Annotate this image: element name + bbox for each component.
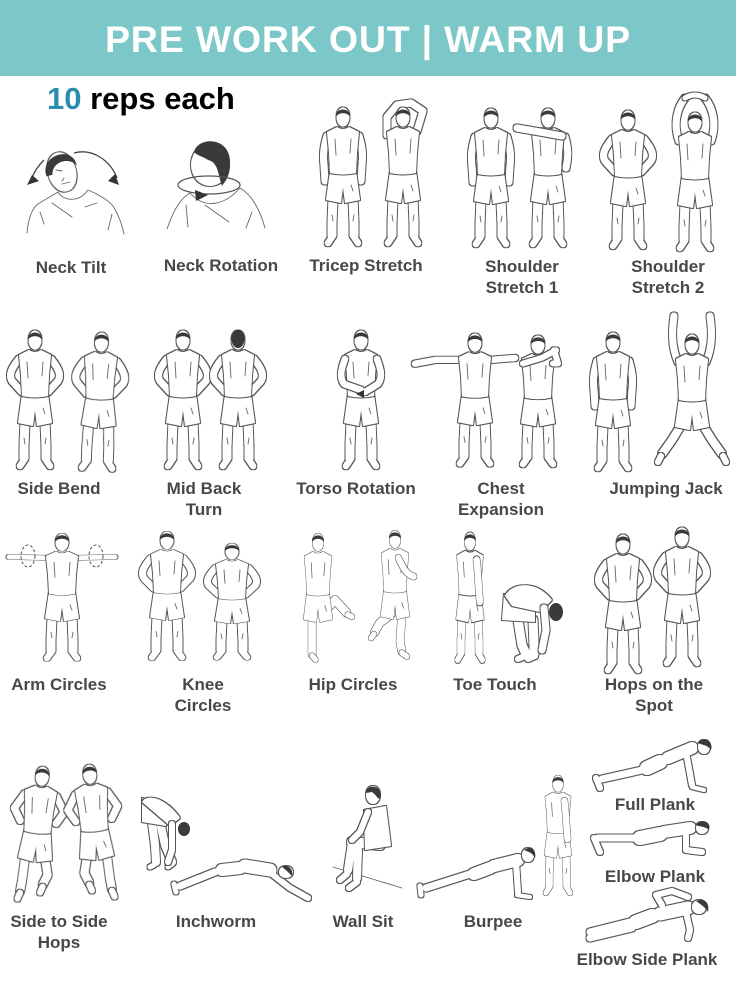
label: Torso Rotation — [296, 479, 416, 498]
label: Shoulder — [485, 257, 559, 276]
label: Neck Rotation — [164, 256, 278, 275]
label: Mid Back — [167, 479, 242, 498]
exercise: shoulder stretch 2: Stretch 2 — [632, 278, 704, 297]
exercise: arm circles — [9, 533, 115, 694]
exercise: hip circles — [304, 530, 414, 694]
exercise: knee circles — [142, 531, 257, 715]
label: Tricep Stretch — [309, 256, 423, 275]
label: Jumping Jack — [609, 479, 723, 498]
label: Side Bend — [17, 479, 101, 498]
exercise: knee circles: Circles — [175, 696, 231, 715]
exercise: shoulder stretch 1 — [471, 108, 568, 297]
title: PRE WORK OUT | WARM UP — [105, 18, 631, 61]
label: Hops on the — [605, 675, 703, 694]
exercise: wall sit — [333, 786, 402, 931]
exercise: side to side hops — [7, 763, 125, 952]
exercise: shoulder stretch 1: Stretch 1 — [486, 278, 558, 297]
exercise: elbow side plank — [577, 891, 718, 969]
exercise: hops on the spot: Spot — [635, 696, 673, 715]
exercise: mid back turn — [158, 330, 263, 519]
label: Inchworm — [176, 912, 256, 931]
header banner — [0, 0, 736, 76]
label: Toe Touch — [453, 675, 537, 694]
exercise: side to side hops: Hops — [38, 933, 80, 952]
exercise: burpee — [420, 775, 572, 931]
exercise: chest expansion: Expansion — [458, 500, 544, 519]
exercise: torso rotation — [296, 330, 416, 498]
subheading: 10 reps each: 10 reps each — [47, 81, 235, 116]
label: Arm Circles — [11, 675, 107, 694]
label: Shoulder — [631, 257, 705, 276]
label: Burpee — [464, 912, 522, 931]
label: Wall Sit — [333, 912, 394, 931]
exercise: inchworm — [142, 798, 308, 931]
label: Elbow Side Plank — [577, 950, 718, 969]
label: Hip Circles — [309, 675, 397, 694]
exercise: hops on the spot — [598, 528, 707, 715]
label: Knee — [182, 675, 224, 694]
exercise: full plank — [596, 739, 712, 814]
exercise: neck tilt — [27, 148, 124, 277]
label: Full Plank — [615, 795, 696, 814]
label: Side to Side — [10, 912, 108, 931]
label: Neck Tilt — [36, 258, 107, 277]
exercise: chest expansion — [415, 333, 558, 519]
exercise: jumping jack — [593, 316, 726, 498]
exercise: shoulder stretch 2 — [603, 95, 714, 297]
exercise: toe touch — [453, 532, 563, 694]
exercise: mid back turn: Turn — [186, 500, 222, 519]
exercise: side bend — [10, 330, 126, 498]
label: Elbow Plank — [605, 867, 706, 886]
exercise: elbow plank — [594, 821, 710, 886]
exercise: neck rotation — [164, 141, 278, 275]
label: Chest — [477, 479, 525, 498]
exercise: tricep stretch — [309, 103, 423, 275]
